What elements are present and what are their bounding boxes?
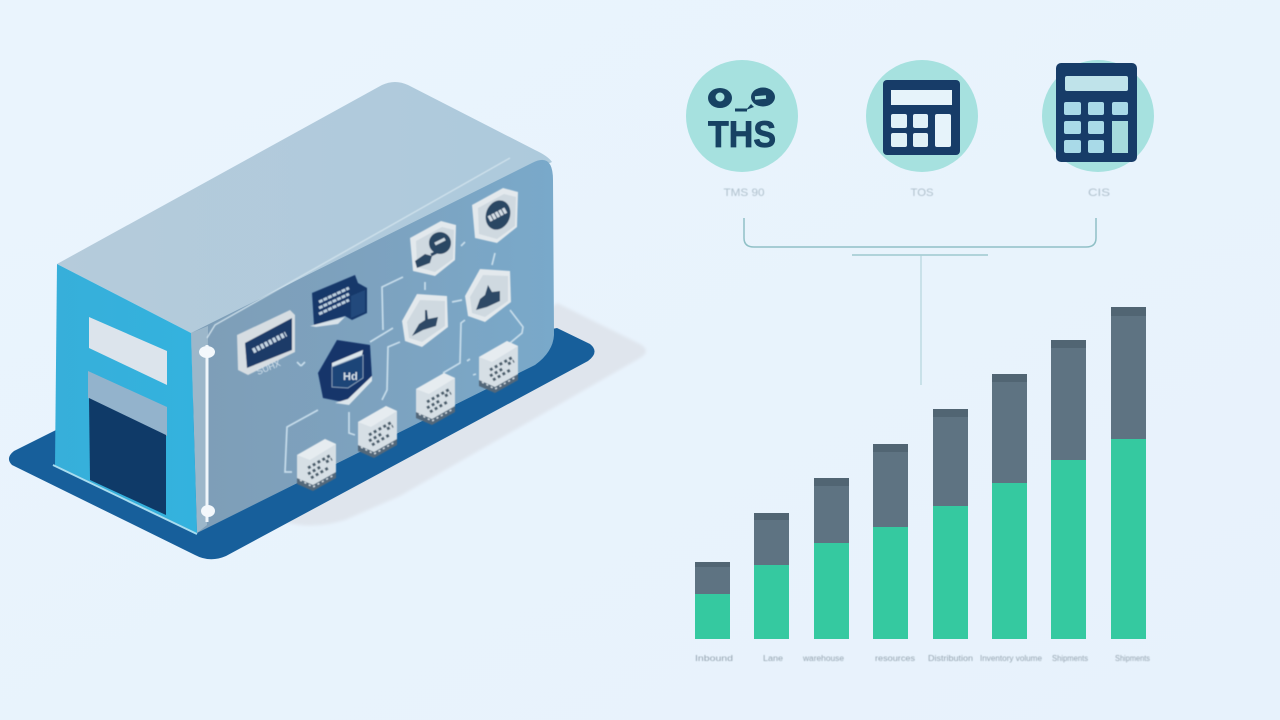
- bar 3: [814, 478, 849, 639]
- vertical conduit: [199, 345, 215, 522]
- bracket connector: [744, 218, 1096, 385]
- roof: [57, 82, 552, 333]
- roof dashed edge: [207, 158, 510, 338]
- bar labels: warehouse: [802, 654, 845, 663]
- icon captions: CIS: [1088, 187, 1110, 199]
- panel icon: dark server terminal: [310, 275, 367, 327]
- front face: [55, 264, 197, 533]
- panel icon: central dark hexagon: Hd: [343, 371, 358, 383]
- module 2: [358, 406, 397, 458]
- module 4: [479, 341, 518, 393]
- wall icon network: [237, 188, 523, 491]
- bar labels: Lane: [763, 654, 784, 663]
- wall corner strip: [191, 326, 208, 533]
- stacked bar chart: [695, 307, 1150, 663]
- icon captions: TOS: [910, 187, 934, 199]
- bar 4: [873, 444, 908, 639]
- system icons row: [686, 60, 1154, 199]
- icon captions: TMS 90: [724, 187, 764, 199]
- icon: calculator on circle: [866, 60, 978, 172]
- door header: [88, 371, 167, 436]
- panel icon: monitor: SUHX: [255, 358, 282, 377]
- bar labels: Shipments: [1052, 654, 1088, 663]
- module 3: [416, 373, 455, 425]
- icon: THS badge: THS: [708, 114, 776, 155]
- panel icon: monitor: [237, 310, 295, 377]
- connector lines: [285, 242, 523, 472]
- bar 1: [695, 562, 730, 639]
- panel icon: hexagon gear: [410, 221, 456, 276]
- bar labels: Inventory volume: [980, 654, 1043, 663]
- bar 2: [754, 513, 789, 639]
- module 1: [297, 439, 336, 491]
- bar 7: [1051, 340, 1086, 639]
- bar labels: Distribution: [928, 654, 973, 663]
- front window: [89, 317, 167, 385]
- bar labels: resources: [875, 654, 915, 663]
- ground shadow: [285, 303, 646, 526]
- panel icon: hexagon ship: [402, 294, 448, 347]
- panel icon: central dark hexagon: [318, 340, 372, 405]
- floor platform: [9, 328, 595, 559]
- bar 5: [933, 409, 968, 639]
- icon: large calculator on circle: [1042, 60, 1154, 172]
- icon: THS badge: [686, 60, 798, 172]
- bar labels: Shipments: [1115, 654, 1150, 663]
- bar labels: [695, 654, 1150, 663]
- base highlight: [53, 465, 197, 534]
- icon captions: [724, 187, 1110, 199]
- bar labels: Inbound: [695, 654, 733, 663]
- panel icon: hexagon badge: [472, 188, 518, 243]
- bar 6: [992, 374, 1027, 639]
- panel icon: hexagon stack: [465, 269, 511, 322]
- loading door: [89, 398, 166, 515]
- illustration: isometric warehouse: [9, 82, 646, 559]
- side wall: [191, 160, 554, 533]
- bar 8: [1111, 307, 1146, 639]
